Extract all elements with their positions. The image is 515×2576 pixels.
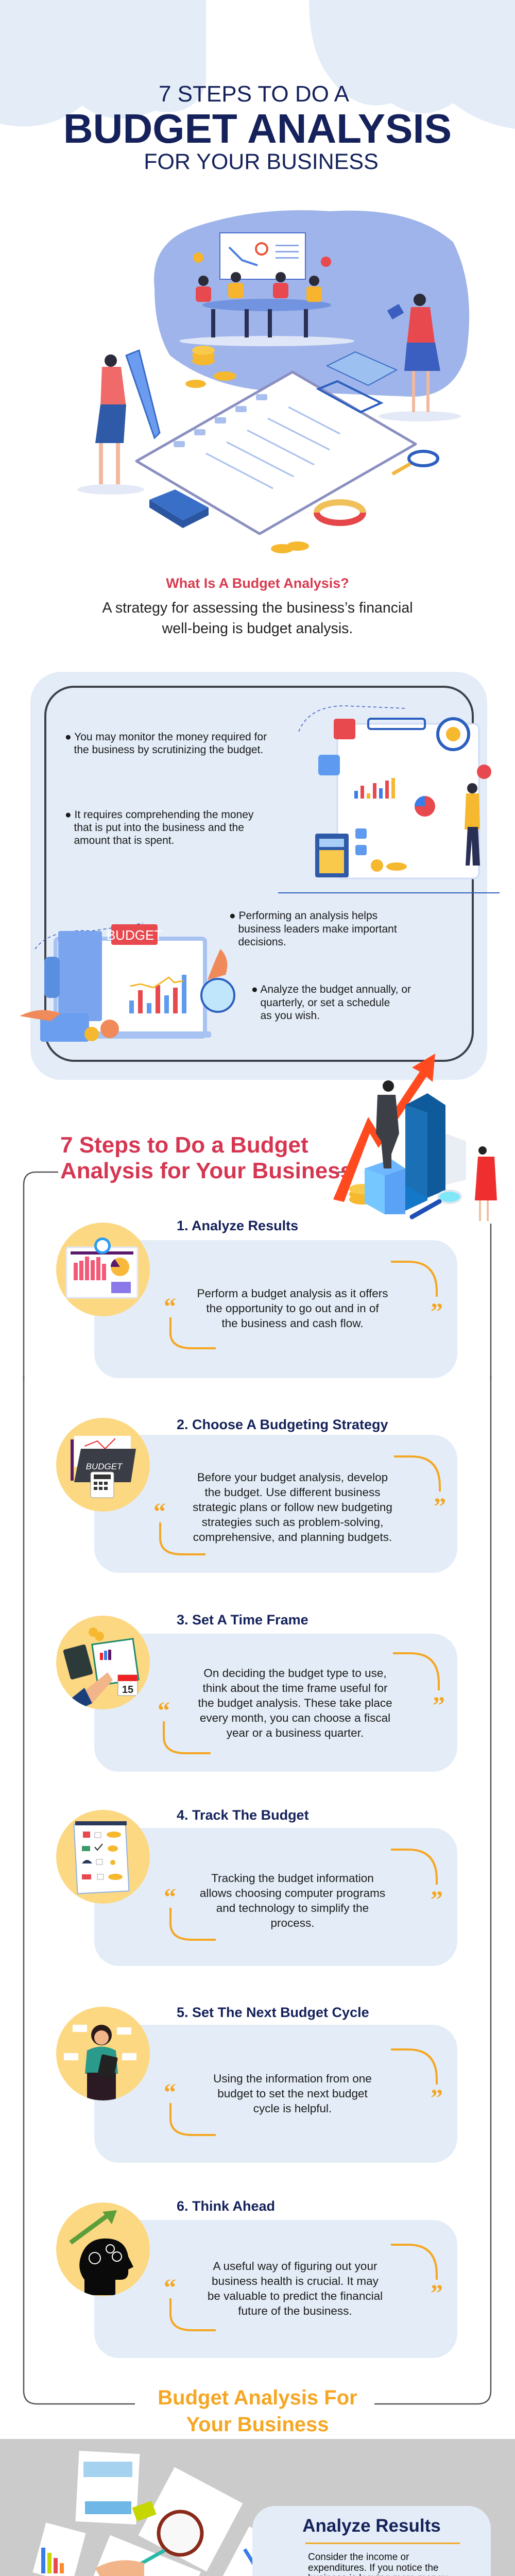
frame: steps section outline [23, 1172, 491, 1381]
step 6 card: ” [431, 2280, 443, 2307]
icon: step 3 planning: 15 [122, 1684, 133, 1696]
step 5 card: budget to set the next budget [217, 2087, 368, 2100]
step 6 card [94, 2220, 457, 2358]
title: FOR YOUR BUSINESS [144, 149, 379, 174]
step 4 card: allows choosing computer programs [200, 1887, 385, 1900]
step 3 card: year or a business quarter. [227, 1726, 364, 1739]
icon: step 3 planning [56, 1616, 150, 1709]
step 5 card: Using the information from one [213, 2072, 372, 2084]
step 4 card: and technology to simplify the [216, 1902, 369, 1914]
bullet 2: that is put into the business and the [74, 822, 244, 834]
bullet 3: business leaders make important [238, 923, 397, 935]
step 6 card: “ [164, 2274, 176, 2301]
title [63, 81, 452, 174]
step 2 card: the budget. Use different business [204, 1486, 381, 1498]
step 1 card: Perform a budget analysis as it offers [197, 1287, 388, 1299]
steps heading: Analysis for Your Business [60, 1158, 353, 1183]
icon: step 5 woman with tablet [56, 2007, 150, 2100]
step 4 card: process. [270, 1917, 315, 1929]
body: analyze results: expenditures. If you notice the [308, 2563, 439, 2573]
step 3 card [94, 1634, 457, 1772]
bullet 3 [229, 910, 397, 948]
icon: step 2 budget board: BUDGET [86, 1462, 123, 1471]
step 4 title: 4. Track The Budget [177, 1807, 309, 1823]
definition text: well-being is budget analysis. [162, 620, 353, 637]
step 3 title: 3. Set A Time Frame [177, 1612, 308, 1628]
bullet 1: ● You may monitor the money required for [65, 731, 267, 743]
step 6 card: business health is crucial. It may [212, 2275, 379, 2287]
step 2 card: ” [434, 1493, 446, 1520]
step 1 card: the opportunity to go out and in of [206, 1301, 379, 1315]
title: analyze results: Analyze Results [302, 2516, 441, 2536]
steps heading [60, 1132, 353, 1183]
icon: step 4 checklist [56, 1810, 150, 1904]
illustration: growth bars [333, 1054, 497, 1221]
step 1 card: ” [431, 1298, 443, 1326]
step 5 card: ” [431, 2084, 443, 2112]
step 6 card: A useful way of figuring out your [213, 2260, 377, 2273]
bullet 1: the business by scrutinizing the budget. [74, 744, 263, 756]
step 1 card [94, 1240, 457, 1378]
step 5 title: 5. Set The Next Budget Cycle [177, 2005, 369, 2020]
bullet 4 [251, 984, 411, 1022]
subheading: budget analysis for your business: Budget Analysis For [158, 2386, 357, 2409]
step 2 card: Before your budget analysis, develop [197, 1470, 388, 1484]
illustration: budget laptop [20, 923, 235, 1042]
header background [0, 0, 515, 129]
step 1 title: 1. Analyze Results [177, 1218, 298, 1233]
bullet 3: ● Performing an analysis helps [229, 910, 377, 922]
title: 7 STEPS TO DO A [159, 81, 349, 107]
step 3 card: On deciding the budget type to use, [203, 1666, 387, 1680]
step 3 card: ” [433, 1692, 445, 1719]
bullet 2: amount that is spent. [74, 835, 174, 846]
icon: step 2 budget board [56, 1418, 150, 1512]
step 4 card: ” [431, 1886, 443, 1913]
step 5 card: cycle is helpful. [253, 2102, 332, 2114]
illustration: analysis desk papers [33, 2451, 252, 2576]
icon: step 6 head with gears [56, 2202, 150, 2296]
step 6 card: be valuable to predict the financial [208, 2290, 383, 2302]
question heading: What Is A Budget Analysis? [166, 575, 349, 591]
step 2 card: “ [153, 1498, 166, 1526]
step 5 card: “ [164, 2079, 176, 2106]
hero illustration [77, 210, 470, 553]
title: BUDGET ANALYSIS [63, 106, 452, 151]
subheading: budget analysis for your business [158, 2386, 357, 2436]
body: analyze results [308, 2552, 447, 2576]
step 6 card: future of the business. [238, 2304, 352, 2317]
step 3 card: “ [158, 1697, 170, 1724]
illustration: clipboard report [278, 705, 500, 893]
bullet 1 [65, 731, 267, 756]
definition text: A strategy for assessing the business’s financial [102, 600, 413, 616]
step 2 card: comprehensive, and planning budgets. [193, 1530, 392, 1544]
step 4 card: Tracking the budget information [211, 1872, 374, 1885]
step 1 card: “ [164, 1293, 176, 1320]
bullet 4: as you wish. [261, 1010, 320, 1022]
panel: key points [30, 672, 487, 1080]
step 3 card: every month, you can choose a fiscal [200, 1711, 390, 1724]
bullet 3: decisions. [238, 936, 286, 948]
bullet 2: ● It requires comprehending the money [65, 809, 253, 821]
step 1 card: the business and cash flow. [221, 1317, 364, 1329]
card: analyze results [252, 2506, 491, 2576]
step 5 card [94, 2025, 457, 2163]
panel: bottom gray section [0, 2439, 515, 2576]
bullet 4: ● Analyze the budget annually, or [251, 984, 411, 995]
bullet 2 [65, 809, 253, 846]
icon: step 1 dashboard [56, 1223, 150, 1316]
step 3 card: think about the time frame useful for [203, 1682, 387, 1694]
step 2 card: strategic plans or follow new budgeting [193, 1500, 392, 1514]
step 2 title: 2. Choose A Budgeting Strategy [177, 1417, 388, 1432]
definition text [102, 600, 413, 637]
step 3 card: the budget analysis. These take place [198, 1696, 392, 1709]
subheading: budget analysis for your business: Your Business [186, 2413, 329, 2436]
step 6 title: 6. Think Ahead [177, 2198, 275, 2214]
step 4 card [94, 1828, 457, 1966]
step 2 card: strategies such as problem-solving, [202, 1516, 383, 1528]
bullet 4: quarterly, or set a schedule [261, 996, 390, 1009]
body: analyze results: Consider the income or [308, 2552, 409, 2563]
illustration: budget laptop: BUDGET [107, 927, 162, 943]
step 4 card: “ [164, 1884, 176, 1911]
steps heading: 7 Steps to Do a Budget [60, 1132, 308, 1158]
step 2 card [94, 1435, 457, 1573]
